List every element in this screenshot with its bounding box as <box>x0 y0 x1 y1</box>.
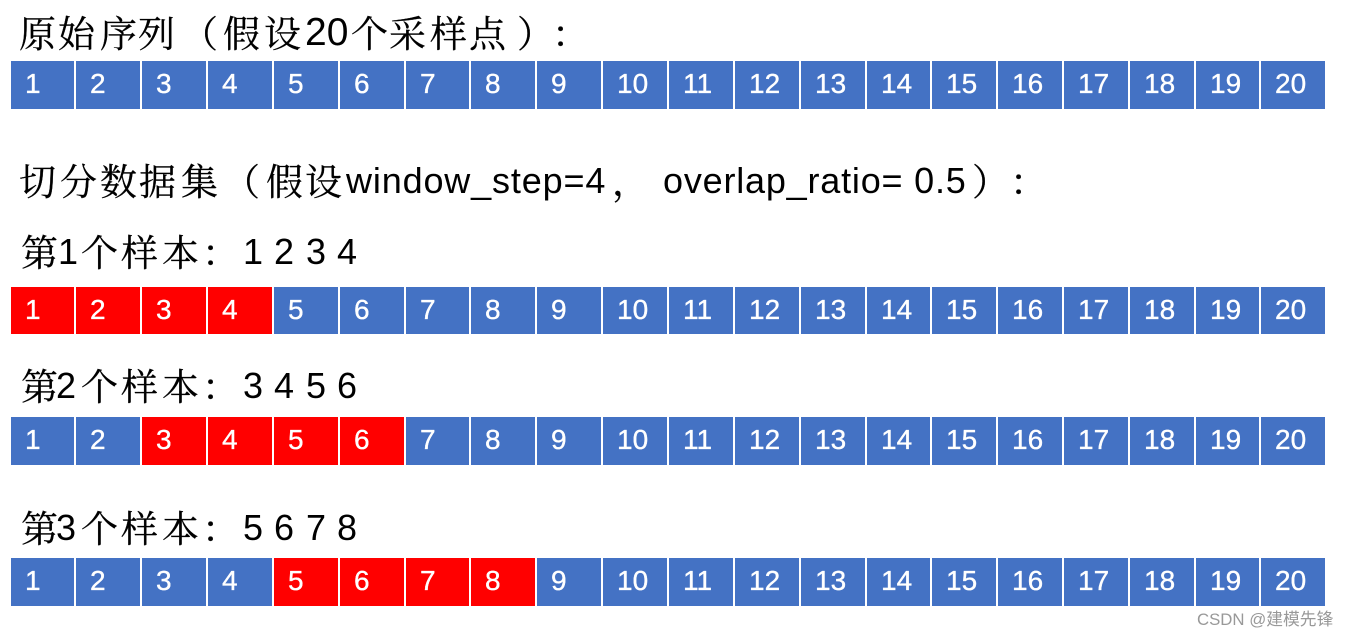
row: sample 1 highlights cells 1-4: 1 <box>25 294 41 325</box>
heading: original sequence: 20 <box>305 11 348 54</box>
heading: original sequence: 原 <box>19 14 56 55</box>
row: original sequence of 20 sample points: 7 <box>420 68 436 99</box>
heading: sample 2: 个 <box>81 367 118 408</box>
heading: sample 3: 个 <box>81 509 118 550</box>
row: sample 1 highlights cells 1-4: 8 <box>485 294 501 325</box>
row: original sequence of 20 sample points: 5 <box>288 68 304 99</box>
row: sample 3 highlights cells 5-8: 20 <box>1275 565 1306 596</box>
heading: dataset split parameters: 设 <box>305 162 342 203</box>
heading: dataset split parameters: 分 <box>60 162 97 203</box>
heading: sample 3: 第 <box>21 509 58 550</box>
heading: sample 1: 1 <box>58 231 78 272</box>
heading: dataset split parameters: ， <box>612 162 649 203</box>
row: original sequence of 20 sample points <box>11 61 1325 109</box>
row: sample 2 highlights cells 3-6: 20 <box>1275 424 1306 455</box>
heading: original sequence: 采 <box>389 14 426 55</box>
row: sample 2 highlights cells 3-6: 3 <box>156 424 172 455</box>
row: original sequence of 20 sample points: 20 <box>1275 68 1306 99</box>
row: sample 2 highlights cells 3-6: 17 <box>1078 424 1109 455</box>
heading: sample 1: 第 <box>21 233 58 274</box>
heading: original sequence: ： <box>552 14 589 55</box>
heading: sample 2: 4 <box>274 365 294 406</box>
row: sample 2 highlights cells 3-6: 14 <box>881 424 912 455</box>
row: sample 3 highlights cells 5-8: 12 <box>749 565 780 596</box>
heading: original sequence: 序 <box>100 14 137 55</box>
row: sample 3 highlights cells 5-8: 8 <box>485 565 501 596</box>
row: sample 1 highlights cells 1-4: 17 <box>1078 294 1109 325</box>
row: sample 3 highlights cells 5-8: 10 <box>617 565 648 596</box>
row: sample 1 highlights cells 1-4: 13 <box>815 294 846 325</box>
heading: sample 3: 6 <box>274 507 294 548</box>
row: sample 1 highlights cells 1-4: 7 <box>420 294 436 325</box>
heading: sample 3: 3 <box>56 507 76 548</box>
heading: sample 2: 3 <box>243 365 263 406</box>
heading: dataset split parameters: 据 <box>139 162 176 203</box>
row: sample 3 highlights cells 5-8 <box>11 558 1325 606</box>
row: sample 2 highlights cells 3-6: 13 <box>815 424 846 455</box>
row: original sequence of 20 sample points: 17 <box>1078 68 1109 99</box>
row: original sequence of 20 sample points: 10 <box>617 68 648 99</box>
row: sample 2 highlights cells 3-6: 2 <box>90 424 106 455</box>
row: sample 3 highlights cells 5-8: 19 <box>1210 565 1241 596</box>
row: sample 1 highlights cells 1-4: 18 <box>1144 294 1175 325</box>
row: sample 2 highlights cells 3-6: 6 <box>354 424 370 455</box>
row: sample 2 highlights cells 3-6: 4 <box>222 424 238 455</box>
heading: sample 2: 6 <box>337 365 357 406</box>
row: original sequence of 20 sample points: 2 <box>90 68 106 99</box>
heading: original sequence: 样 <box>430 14 467 55</box>
heading: sample 2: 样 <box>121 367 158 408</box>
row: sample 1 highlights cells 1-4: 4 <box>222 294 238 325</box>
heading: dataset split parameters <box>19 160 1047 203</box>
heading: sample 2: 第 <box>21 367 58 408</box>
heading: dataset split parameters: （ <box>223 162 260 203</box>
row: sample 1 highlights cells 1-4: 12 <box>749 294 780 325</box>
row: sample 1 highlights cells 1-4: 5 <box>288 294 304 325</box>
heading: sample 3: ： <box>202 509 239 550</box>
row: sample 1 highlights cells 1-4: 9 <box>551 294 567 325</box>
heading: dataset split parameters: overlap_ratio= 0.5 <box>663 160 967 201</box>
row: original sequence of 20 sample points: 13 <box>815 68 846 99</box>
row: sample 1 highlights cells 1-4: 10 <box>617 294 648 325</box>
heading: dataset split parameters: 集 <box>181 162 218 203</box>
row: original sequence of 20 sample points: 12 <box>749 68 780 99</box>
row: original sequence of 20 sample points: 4 <box>222 68 238 99</box>
heading: original sequence: 个 <box>351 14 388 55</box>
heading: original sequence: 始 <box>58 14 95 55</box>
row: sample 2 highlights cells 3-6: 19 <box>1210 424 1241 455</box>
row: sample 1 highlights cells 1-4 <box>11 287 1325 334</box>
row: sample 1 highlights cells 1-4: 20 <box>1275 294 1306 325</box>
row: sample 3 highlights cells 5-8: 4 <box>222 565 238 596</box>
heading: dataset split parameters: ） <box>972 162 1009 203</box>
row: sample 3 highlights cells 5-8: 9 <box>551 565 567 596</box>
heading: sample 3: 样 <box>121 509 158 550</box>
heading: sample 2: ： <box>202 367 239 408</box>
row: original sequence of 20 sample points: 18 <box>1144 68 1175 99</box>
row: sample 2 highlights cells 3-6: 10 <box>617 424 648 455</box>
row: sample 2 highlights cells 3-6: 9 <box>551 424 567 455</box>
heading: sample 1: 2 <box>274 231 294 272</box>
row: original sequence of 20 sample points: 1 <box>25 68 41 99</box>
watermark: CSDN @建模先锋 <box>1197 610 1333 629</box>
row: sample 1 highlights cells 1-4: 3 <box>156 294 172 325</box>
row: original sequence of 20 sample points: 15 <box>946 68 977 99</box>
row: sample 3 highlights cells 5-8: 6 <box>354 565 370 596</box>
heading: sample 1 <box>21 231 357 274</box>
heading: sample 1: ： <box>202 233 239 274</box>
row: sample 1 highlights cells 1-4: 2 <box>90 294 106 325</box>
row: sample 2 highlights cells 3-6: 8 <box>485 424 501 455</box>
row: sample 3 highlights cells 5-8: 2 <box>90 565 106 596</box>
row: sample 3 highlights cells 5-8: 3 <box>156 565 172 596</box>
row: sample 3 highlights cells 5-8: 11 <box>683 565 712 596</box>
row: original sequence of 20 sample points: 8 <box>485 68 501 99</box>
heading: original sequence: 点 <box>469 14 506 55</box>
row: original sequence of 20 sample points: 14 <box>881 68 912 99</box>
heading: sample 3: 7 <box>306 507 326 548</box>
row: sample 3 highlights cells 5-8: 17 <box>1078 565 1109 596</box>
heading: sample 1: 4 <box>337 231 357 272</box>
heading: sample 2: 2 <box>56 365 76 406</box>
row: sample 3 highlights cells 5-8: 5 <box>288 565 304 596</box>
heading: original sequence <box>19 11 589 55</box>
heading: sample 1: 样 <box>121 233 158 274</box>
row: sample 1 highlights cells 1-4: 19 <box>1210 294 1241 325</box>
row: sample 3 highlights cells 5-8: 18 <box>1144 565 1175 596</box>
row: sample 2 highlights cells 3-6: 15 <box>946 424 977 455</box>
row: sample 2 highlights cells 3-6: 1 <box>25 424 41 455</box>
row: sample 3 highlights cells 5-8: 7 <box>420 565 436 596</box>
row: sample 3 highlights cells 5-8: 16 <box>1012 565 1043 596</box>
heading: dataset split parameters: 数 <box>100 162 137 203</box>
row: sample 1 highlights cells 1-4: 6 <box>354 294 370 325</box>
row: original sequence of 20 sample points: 16 <box>1012 68 1043 99</box>
row: sample 3 highlights cells 5-8: 13 <box>815 565 846 596</box>
heading: sample 3 <box>21 507 357 550</box>
heading: sample 3: 8 <box>337 507 357 548</box>
row: sample 2 highlights cells 3-6: 18 <box>1144 424 1175 455</box>
heading: sample 2: 5 <box>306 365 326 406</box>
heading: sample 2: 本 <box>162 367 199 408</box>
row: original sequence of 20 sample points: 9 <box>551 68 567 99</box>
heading: original sequence: 假 <box>223 14 260 55</box>
row: sample 2 highlights cells 3-6: 11 <box>683 424 712 455</box>
row: sample 3 highlights cells 5-8: 15 <box>946 565 977 596</box>
row: sample 1 highlights cells 1-4: 11 <box>683 294 712 325</box>
heading: original sequence: ） <box>517 14 554 55</box>
row: sample 2 highlights cells 3-6: 12 <box>749 424 780 455</box>
heading: sample 1: 个 <box>81 233 118 274</box>
row: sample 2 highlights cells 3-6: 16 <box>1012 424 1043 455</box>
row: sample 2 highlights cells 3-6: 5 <box>288 424 304 455</box>
heading: sample 1: 1 <box>243 231 263 272</box>
heading: dataset split parameters: 切 <box>19 162 56 203</box>
heading: original sequence: 设 <box>264 14 301 55</box>
heading: sample 2 <box>21 365 357 408</box>
row: sample 1 highlights cells 1-4: 14 <box>881 294 912 325</box>
row: sample 2 highlights cells 3-6 <box>11 417 1325 465</box>
heading: original sequence: （ <box>181 14 218 55</box>
heading: original sequence: 列 <box>138 14 175 55</box>
row: original sequence of 20 sample points: 19 <box>1210 68 1241 99</box>
heading: dataset split parameters: 假 <box>266 162 303 203</box>
text: ： <box>1010 162 1047 203</box>
row: sample 3 highlights cells 5-8: 1 <box>25 565 41 596</box>
heading: dataset split parameters: window_step=4 <box>346 160 606 201</box>
row: original sequence of 20 sample points: 6 <box>354 68 370 99</box>
row: original sequence of 20 sample points: 3 <box>156 68 172 99</box>
heading: sample 1: 3 <box>306 231 326 272</box>
row: sample 2 highlights cells 3-6: 7 <box>420 424 436 455</box>
row: original sequence of 20 sample points: 11 <box>683 68 712 99</box>
row: sample 3 highlights cells 5-8: 14 <box>881 565 912 596</box>
heading: sample 3: 本 <box>162 509 199 550</box>
row: sample 1 highlights cells 1-4: 15 <box>946 294 977 325</box>
heading: sample 1: 本 <box>162 233 199 274</box>
row: sample 1 highlights cells 1-4: 16 <box>1012 294 1043 325</box>
heading: sample 3: 5 <box>243 507 263 548</box>
